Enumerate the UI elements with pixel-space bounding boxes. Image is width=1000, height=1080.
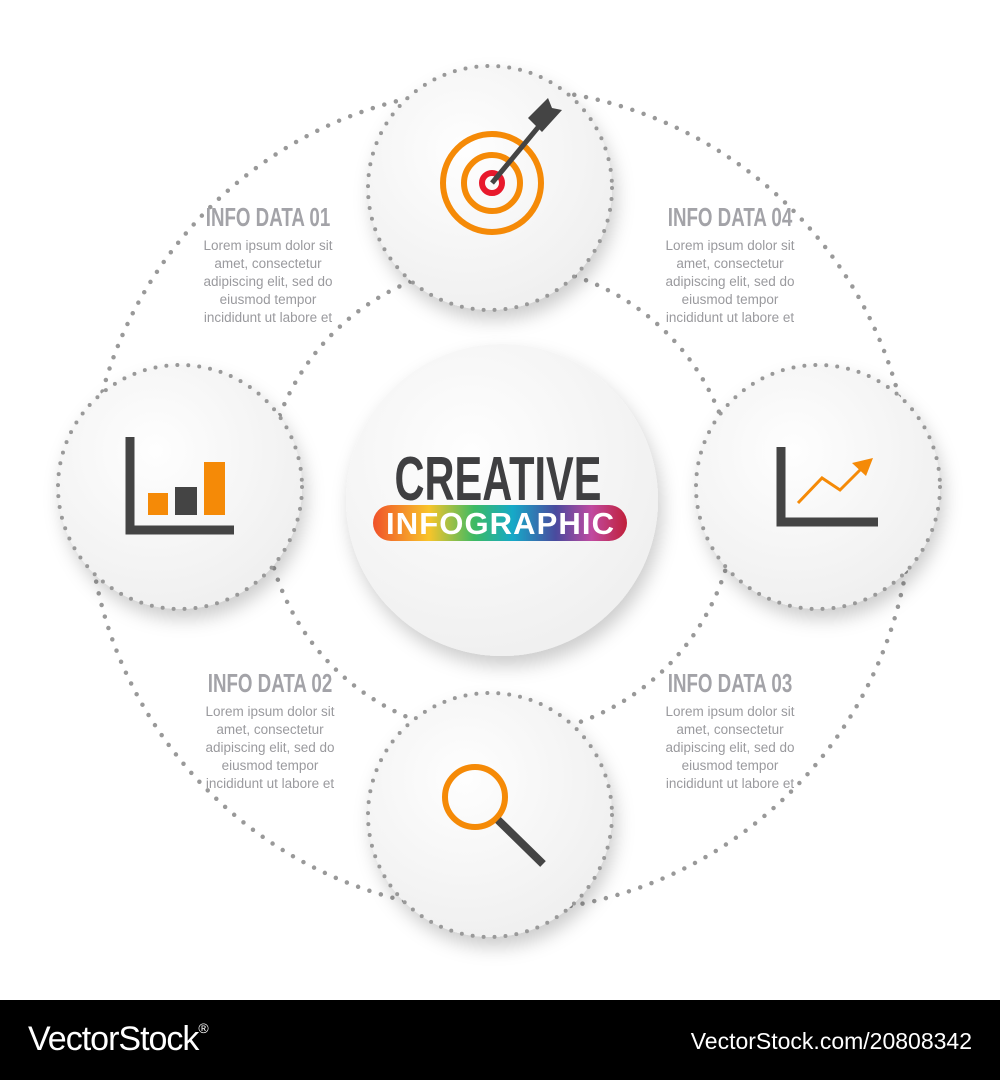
circle: bottom (magnifier) [368,693,612,937]
icon: target [443,98,562,232]
subtitle: infographic banner: INFOGRAPHIC [386,506,614,541]
circle: left (bar chart) [58,365,302,609]
text: info 03: Lorem ipsum dolor sit amet, consectetur adipiscing elit, sed do eiusmod tempor incididunt ut labore et [665,704,795,791]
text: info 02: INFO DATA 02 [208,668,332,698]
title: creative: CREATIVE [395,445,601,514]
text: info 02: Lorem ipsum dolor sit amet, consectetur adipiscing elit, sed do eiusmod tempor incididunt ut labore et [205,704,335,791]
footer logo: VectorStock® [28,1020,208,1058]
text: info 04: INFO DATA 04 [668,202,792,232]
text: info 01: INFO DATA 01 [206,202,330,232]
footer [0,1000,1000,1080]
dotted ring inner [264,264,736,736]
icon: magnifier [445,767,543,864]
text: info 04: Lorem ipsum dolor sit amet, consectetur adipiscing elit, sed do eiusmod tempor incididunt ut labore et [665,238,795,325]
circle: right (line chart) [696,365,940,609]
center circle [346,344,658,656]
text: info 01: Lorem ipsum dolor sit amet, consectetur adipiscing elit, sed do eiusmod tempor incididunt ut labore et [203,238,333,325]
icon: line chart [781,447,878,522]
circle: top (target) [368,66,612,310]
footer url: VectorStock.com/20808342 [691,1028,972,1054]
text: info 03: INFO DATA 03 [668,668,792,698]
dotted ring outer [88,88,912,912]
icon: bar chart [130,437,234,530]
